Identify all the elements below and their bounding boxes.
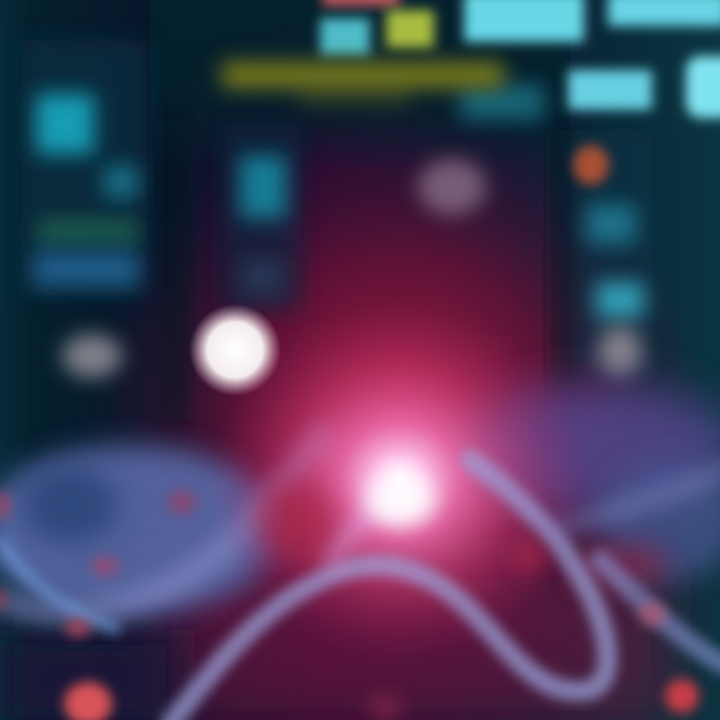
panel: top red bar [322,0,400,6]
block: teal highlight [240,156,286,218]
panel: dim teal box [460,84,544,120]
panel: top cyan box [320,18,370,56]
panel: top right cyan box [608,0,720,26]
ribbons: left mass [0,430,330,630]
ribbons: right mass [460,384,720,587]
block: cyan box [596,282,644,318]
block: green text band [38,220,138,244]
panel: second column [225,125,300,310]
icon: pale blob [598,326,642,378]
panel: left column [22,40,147,295]
block: cyan highlight [36,94,94,154]
panel: top yellow-green box [386,10,434,48]
panel: right edge cyan box [686,56,720,118]
panel: right column [572,130,652,378]
bright core [366,474,434,526]
red nodes [0,480,699,720]
block: blue band [34,252,138,286]
block: muted slate [242,260,282,294]
block: teal box [586,204,636,244]
icon: orange blob [573,145,609,185]
panel: middle cyan box [568,70,652,110]
top row of panels [320,0,720,120]
block: lower cyan highlight [104,166,138,198]
icon: white circle [189,304,281,396]
icon: grey blob upper [418,159,486,215]
heading: blurred yellow title [222,62,504,106]
ribbons: foreground strands [170,460,720,720]
panel: top wide cyan box [464,0,584,42]
icon: pale blob left [62,334,122,378]
central glow [210,300,590,660]
